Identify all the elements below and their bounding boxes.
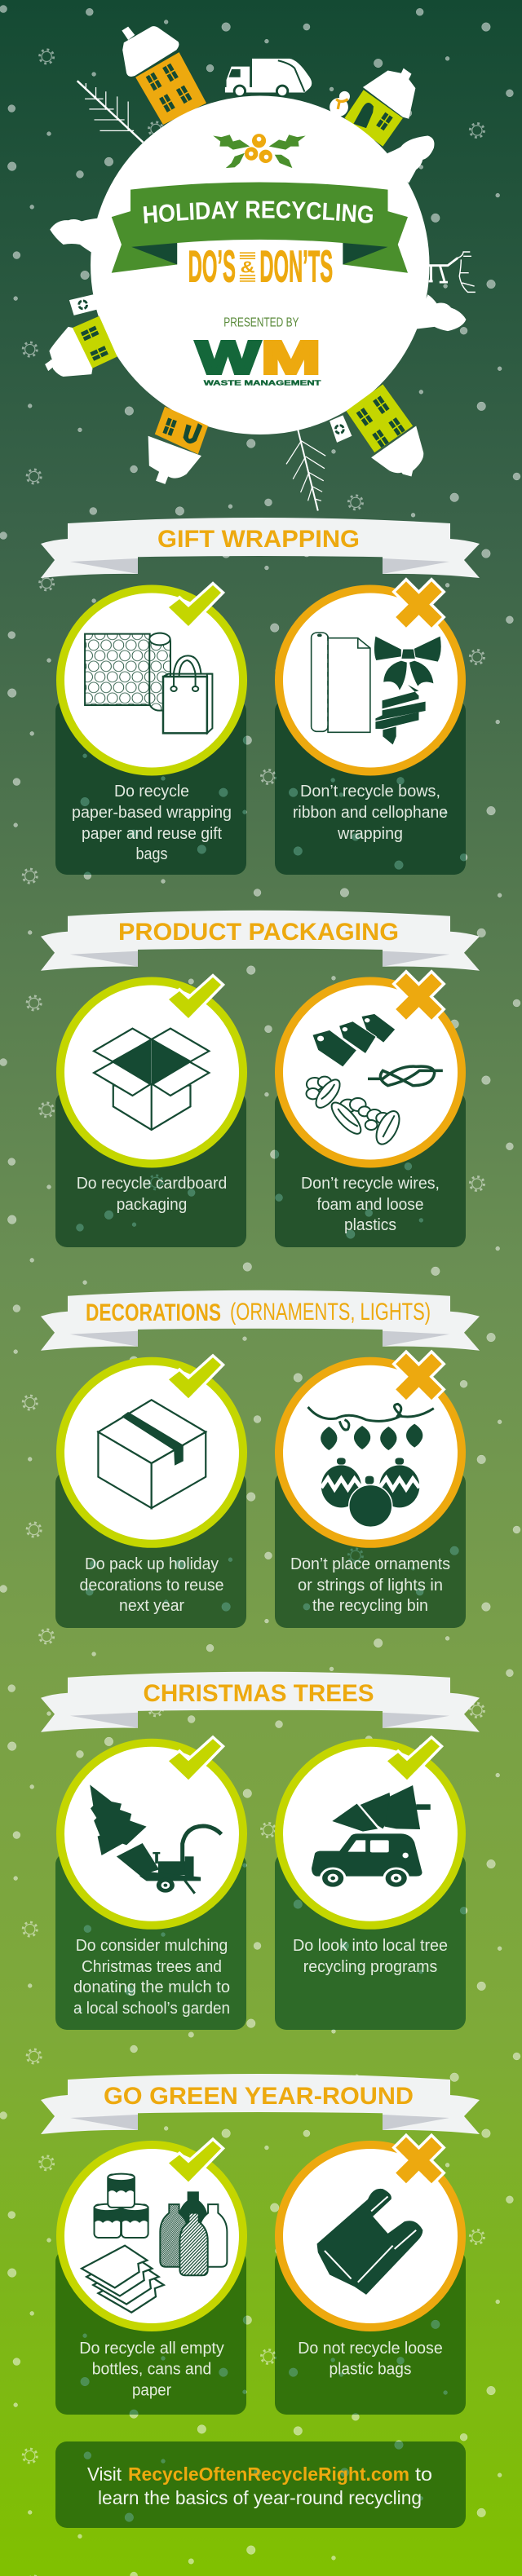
house: lime lower-right	[346, 384, 423, 476]
text: do recycle paper	[72, 783, 232, 863]
subtitle: Do's and Don'ts: &	[241, 259, 255, 277]
text: don't recycle wires: plastics	[344, 1216, 396, 1234]
garbage truck	[225, 59, 312, 98]
card: don't recycle wires	[275, 969, 466, 1247]
card: recycle bottles, cans and paper	[55, 2137, 247, 2415]
Waste Management logo	[197, 332, 322, 387]
bare tree top-left	[77, 81, 144, 143]
heading: go green year-round: GO GREEN YEAR-ROUND	[104, 2083, 414, 2110]
text: mulch trees: Do consider mulching	[76, 1937, 228, 1955]
text: recycle bottles: paper	[132, 2382, 171, 2400]
text: do recycle paper: bags	[135, 845, 168, 863]
text: don't recycle bows: Don’t recycle bows,	[300, 783, 440, 801]
icon: plastic bag	[317, 2189, 422, 2295]
text: don't recycle bows: wrapping	[337, 825, 403, 843]
text: don't place ornaments: Don’t place ornaments	[290, 1555, 450, 1573]
holly decoration	[213, 134, 306, 168]
icon: bubble wrap and gift bag	[85, 633, 212, 733]
icon: open cardboard box	[94, 1029, 209, 1130]
icon: paper roll, bow and ribbon	[312, 633, 441, 744]
section banner: decorations	[41, 1290, 480, 1351]
text: call to action	[87, 2464, 432, 2508]
text: mulch trees: Christmas trees and	[82, 1958, 222, 1976]
card: recycle cardboard	[55, 973, 247, 1247]
card: don't recycle bows	[275, 577, 466, 875]
text: recycle bottles: Do recycle all empty	[79, 2340, 224, 2358]
text: do recycle cardboard: Do recycle cardboard	[77, 1175, 227, 1193]
text: don't recycle wires	[301, 1175, 440, 1234]
text: mulch trees: donating the mulch to	[73, 1978, 230, 1996]
call to action panel	[55, 2441, 466, 2528]
text: recycle bottles	[79, 2340, 224, 2400]
text: do recycle cardboard: packaging	[117, 1196, 187, 1214]
section banner: gift wrapping	[41, 518, 480, 578]
recycling bin left	[69, 294, 97, 315]
text: call to action: RecycleOftenRecycleRight.com	[128, 2464, 409, 2485]
icon: sealed box	[98, 1400, 206, 1508]
text: don't recycle bows: ribbon and cellophane	[293, 804, 448, 822]
text: plastic bags: Do not recycle loose	[298, 2340, 443, 2358]
house: orange top-left	[122, 26, 206, 125]
text: call to action: to	[415, 2464, 432, 2485]
card: mulch trees	[55, 1735, 247, 2030]
Waste Management logo: WASTE MANAGEMENT	[204, 379, 322, 387]
text: mulch trees	[73, 1937, 230, 2018]
text: do recycle paper: paper and reuse gift	[82, 825, 222, 843]
recycling bin bottom	[330, 415, 352, 443]
heading: gift wrapping: GIFT WRAPPING	[157, 526, 360, 553]
card: don't recycle plastic bags	[275, 2133, 466, 2415]
text: don't recycle wires: foam and loose	[316, 1196, 424, 1214]
main white globe	[91, 96, 430, 434]
text: pack up decorations: next year	[119, 1597, 184, 1615]
section banner: product packaging	[41, 911, 480, 971]
text: local tree recycling	[293, 1937, 448, 1976]
heading: decorations: DECORATIONS	[86, 1299, 221, 1326]
text: mulch trees: a local school’s garden	[73, 2000, 230, 2018]
bare tree bottom	[286, 430, 325, 511]
Waste Management logo: W	[197, 332, 261, 383]
heading: decorations: (ORNAMENTS, LIGHTS)	[230, 1299, 431, 1325]
text: don't place ornaments: or strings of lights in	[298, 1577, 443, 1595]
section banner: christmas trees	[41, 1672, 480, 1732]
subtitle: Do's and Don'ts: DO’S	[188, 240, 236, 291]
Waste Management logo: M	[261, 332, 321, 383]
card: local tree recycling	[275, 1735, 466, 2030]
heading: product packaging: PRODUCT PACKAGING	[118, 919, 399, 946]
card: pack up decorations	[55, 1353, 247, 1628]
text: do recycle cardboard	[77, 1175, 227, 1214]
text: pack up decorations: decorations to reuse	[80, 1577, 223, 1595]
icon: cans, bottles and paper	[82, 2174, 227, 2313]
heading: christmas trees: CHRISTMAS TREES	[144, 1680, 374, 1707]
text: call to action: Visit	[87, 2464, 122, 2485]
text: call to action: learn the basics of year-round recycling	[98, 2487, 422, 2508]
text: don't place ornaments: the recycling bin	[312, 1597, 428, 1615]
title: Holiday Recycling: HOLIDAY RECYCLING	[144, 201, 373, 223]
text: plastic bags: plastic bags	[330, 2361, 411, 2379]
icon: car with tree on roof	[312, 1785, 431, 1889]
text: plastic bags	[298, 2340, 443, 2379]
icon: string lights and ornaments	[308, 1404, 434, 1527]
title ribbon	[111, 183, 408, 273]
text: don't recycle wires: Don’t recycle wires,	[301, 1175, 440, 1193]
text: don't recycle bows	[293, 783, 448, 843]
section banner: go green year-round	[41, 2074, 480, 2134]
card: recycle wrapping paper	[55, 581, 247, 875]
text: recycle bottles: bottles, cans and	[92, 2361, 211, 2379]
text: local tree recycling: Do look into local tree	[293, 1937, 448, 1955]
icon: tree and wood chipper	[90, 1784, 221, 1894]
reindeer	[429, 252, 476, 292]
title: Holiday Recycling	[144, 201, 373, 223]
header planet illustration	[45, 26, 476, 511]
snowy mounds	[50, 136, 466, 331]
house: orange bottom	[148, 407, 208, 484]
heading: decorations	[86, 1299, 431, 1326]
presented by label: PRESENTED BY	[223, 315, 299, 329]
text: don't place ornaments	[290, 1555, 450, 1615]
text: do recycle paper: paper-based wrapping	[72, 804, 232, 822]
text: pack up decorations: Do pack up holiday	[85, 1555, 219, 1573]
card: don't place ornaments	[275, 1350, 466, 1628]
icon: tags, wire knot and foam peanuts	[307, 1013, 443, 1147]
text: pack up decorations	[80, 1555, 223, 1615]
text: local tree recycling: recycling programs	[303, 1958, 437, 1976]
house: lime top-right with snowman	[330, 68, 415, 147]
text: do recycle paper: Do recycle	[114, 783, 189, 801]
header planet illustration: DON’TS	[259, 240, 333, 291]
house: lime lower-left	[45, 316, 117, 377]
